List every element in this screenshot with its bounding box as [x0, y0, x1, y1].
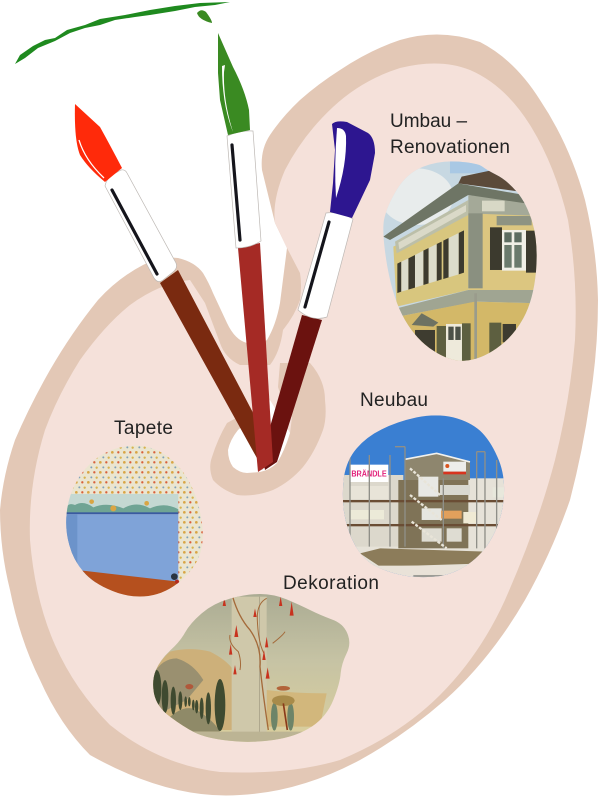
brush: green — [197, 10, 273, 472]
label: Umbau – Renovationen: Umbau – — [390, 111, 468, 132]
photo: Dekoration mural — [153, 594, 350, 742]
green brush highlight — [222, 65, 233, 132]
blue brush stripe — [305, 222, 329, 307]
blue brush highlight — [335, 128, 346, 198]
blue brush ferrule — [298, 213, 353, 318]
blue brush handle — [262, 315, 322, 470]
label: Dekoration: Dekoration — [283, 573, 379, 594]
red brush stripe — [112, 190, 157, 274]
green paint drop — [197, 10, 212, 23]
photo: Neubau construction site — [342, 415, 504, 578]
thumb hole — [228, 400, 290, 473]
banner: BRÄNDLE: BRÄNDLE — [351, 469, 387, 478]
green brush stripe — [232, 145, 240, 240]
red brush tip — [75, 104, 122, 182]
label: Tapete: Tapete — [114, 418, 173, 439]
red brush ferrule — [105, 170, 177, 282]
label: Neubau: Neubau — [360, 390, 428, 411]
label: Umbau – Renovationen: Renovationen — [390, 137, 510, 158]
photo: Umbau house — [383, 162, 537, 361]
photo: Tapete room — [66, 446, 203, 596]
green brush tip — [218, 33, 250, 135]
green brush ferrule — [227, 131, 261, 248]
green brush handle — [238, 243, 273, 472]
blue brush tip — [330, 121, 375, 218]
brush: red — [75, 104, 270, 470]
brush: blue — [262, 121, 375, 470]
red brush highlight — [79, 140, 104, 178]
red brush handle — [160, 270, 270, 470]
banner: BRÄNDLE — [350, 465, 388, 482]
thumb hole ring — [210, 363, 326, 495]
green brush stroke — [15, 2, 230, 64]
